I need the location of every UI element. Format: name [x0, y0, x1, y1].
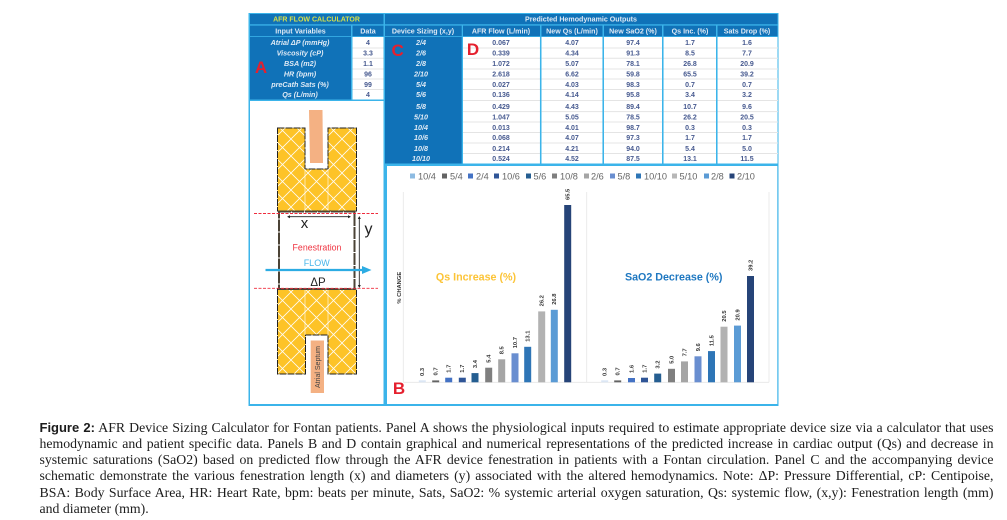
flow arrow	[266, 266, 372, 274]
bars: Qs increase: 26.8	[552, 293, 558, 305]
chart legend: 10/6	[502, 171, 520, 181]
flow label: FLOW	[304, 258, 330, 268]
output value cells: 8.5	[685, 50, 695, 58]
device sizing column: 2/6	[415, 48, 427, 58]
input variable labels: HR (bpm)	[284, 70, 317, 78]
input values	[352, 37, 384, 100]
output value cells: 0.7	[685, 82, 695, 89]
input column headers	[250, 26, 384, 36]
y axis label: % CHANGE	[397, 272, 403, 304]
panel A: input calculator	[250, 14, 384, 100]
chart legend: 5/8	[618, 171, 630, 181]
figure caption: Figure 2: AFR Device Sizing Calculator for Fontan patients. Panel A shows the physiological inputs required to estimate appropriate device size via a calculator that uses	[40, 420, 994, 435]
output value cells: 11.5	[740, 156, 754, 163]
figure frame	[248, 13, 778, 406]
lower atrial septum with label	[311, 340, 324, 393]
chart legend: 10/4	[418, 171, 436, 181]
output value cells: 4.14	[565, 92, 579, 99]
input variable labels: Viscosity (cP)	[277, 48, 324, 58]
dashed boundary lines	[254, 214, 378, 288]
device sizing column	[385, 37, 462, 164]
input values: 1.1	[363, 61, 373, 68]
bars: Qs increase: 65.5	[566, 188, 572, 200]
y dimension arrow	[358, 216, 372, 288]
output value cells: 1.7	[685, 135, 695, 142]
input variable labels: Atrial ΔP (mmHg)	[270, 38, 330, 47]
figure caption: systemic saturations (SaO2) based on predicted flow through the AFR device fenestration in patients with a Fontan circulation. Panel C and the accompanying device	[40, 452, 994, 467]
figure caption: and diameter (mm).	[40, 501, 149, 516]
output value cells: 98.7	[626, 125, 640, 132]
device sizing column: 2/10	[413, 70, 428, 78]
output value cells: 95.8	[626, 92, 640, 99]
input column headers: Data	[360, 27, 376, 35]
output value cells: 0.013	[492, 125, 510, 132]
lower atrial septum with label: Atrial Septum	[315, 346, 322, 388]
output value cells: 4.34	[565, 50, 579, 58]
bars: SaO2 decrease: 0.3	[603, 367, 609, 376]
output value cells: 65.5	[683, 72, 697, 78]
output value cells: 0.068	[492, 135, 510, 142]
device sizing column: 2/8	[415, 59, 426, 68]
output value cells: 2.618	[492, 72, 510, 78]
output value cells: 5.05	[565, 114, 579, 122]
output value cells: 0.339	[492, 50, 510, 58]
chart legend: 2/6	[591, 171, 604, 181]
figure caption: hemodynamic and patient specific data. Panels B and D contain graphical and numerical representations of the predicted increase in cardiac output (Qs) and decrease in	[40, 436, 994, 451]
output value cells: 5.0	[742, 146, 752, 153]
bars: SaO2 decrease: 0.7	[616, 367, 622, 376]
output value cells: 0.524	[492, 156, 510, 163]
output column headers: Sats Drop (%)	[724, 27, 771, 35]
chart legend: 5/4	[450, 171, 463, 181]
bars: Qs increase: 8.5	[500, 345, 506, 354]
output value cells: 10.7	[683, 104, 697, 111]
chart axis lines	[403, 192, 769, 382]
lower device disc	[278, 289, 356, 374]
output value cells: 94.0	[626, 146, 640, 153]
output value cells: 13.1	[683, 156, 697, 163]
bars: SaO2 decrease: 11.5	[710, 334, 716, 346]
output value cells: 4.07	[565, 40, 579, 47]
x dimension arrow: x	[301, 215, 309, 232]
chart legend: 5/6	[534, 171, 546, 181]
output value cells: 0.429	[492, 104, 510, 111]
bars: Qs increase: 26.2	[540, 295, 546, 306]
panel C and D: predicted outputs table	[385, 14, 778, 164]
bars: Qs increase: 1.7	[447, 365, 453, 373]
output value cells: 4.52	[565, 156, 579, 163]
bars: SaO2 decrease: 3.2	[656, 361, 662, 369]
bars: Qs increase	[419, 188, 572, 382]
output column headers	[385, 26, 778, 36]
output value cells: 4.43	[565, 104, 579, 111]
output value cells: 1.047	[492, 114, 510, 122]
input values: 4	[366, 92, 370, 99]
output value cells: 1.6	[742, 40, 752, 47]
input values: 3.3	[363, 50, 373, 58]
device sizing column: 10/8	[414, 144, 428, 153]
output value cells: 6.62	[565, 72, 579, 78]
output value cells: 20.9	[740, 61, 754, 68]
output column headers: Device Sizing (x,y)	[392, 27, 455, 35]
output value cells: 0.7	[742, 82, 752, 89]
output value cells: 97.4	[626, 40, 640, 47]
chart legend: 2/8	[711, 171, 724, 181]
output column headers: AFR Flow (L/min)	[472, 27, 531, 35]
output value cells: 0.067	[492, 40, 510, 47]
bars: SaO2 decrease: 1.7	[642, 365, 648, 373]
device sizing column: 5/6	[416, 90, 427, 99]
bars: Qs increase: 10.7	[513, 337, 519, 348]
input values: 99	[364, 82, 372, 89]
output value cells: 0.027	[492, 82, 510, 89]
output value cells: 78.5	[626, 114, 640, 122]
bars: Qs increase: 3.4	[473, 359, 479, 368]
output value cells: 4.03	[565, 82, 579, 89]
device sizing column: 5/4	[416, 80, 426, 89]
input variable labels: preCath Sats (%)	[270, 80, 329, 89]
figure caption	[40, 420, 994, 516]
fenestration label: Fenestration	[293, 243, 342, 253]
output value cells: 87.5	[626, 156, 640, 163]
chart legend	[410, 171, 755, 181]
input variable labels	[250, 37, 351, 100]
device sizing column: 10/4	[414, 123, 428, 132]
bars: Qs increase: 0.7	[434, 367, 440, 376]
chart legend: 10/8	[560, 171, 578, 181]
output value cells: 4.07	[565, 135, 579, 142]
output value cells: 0.136	[492, 92, 510, 99]
output value cells: 0.3	[742, 125, 752, 132]
device sizing column: 10/10	[412, 154, 430, 163]
output value cells	[463, 37, 778, 164]
output value cells: 0.3	[685, 125, 695, 132]
bars: SaO2 decrease: 9.6	[696, 342, 702, 351]
bars: SaO2 decrease	[601, 260, 754, 382]
device sizing column: 2/4	[415, 38, 426, 47]
panel B: bar charts	[387, 166, 777, 404]
bars: Qs increase: 0.3	[420, 367, 426, 376]
input column headers: Input Variables	[275, 27, 326, 35]
output value cells: 97.3	[626, 135, 640, 142]
calculator title: AFR FLOW CALCULATOR	[273, 17, 360, 24]
output value cells: 98.3	[626, 82, 640, 89]
output value cells: 59.8	[626, 72, 640, 78]
output value cells: 4.01	[565, 125, 579, 132]
bars: Qs increase: 1.7	[460, 365, 466, 373]
chart legend: 2/10	[737, 171, 755, 181]
output value cells: 4.21	[565, 146, 579, 153]
output value cells: 1.7	[742, 135, 752, 142]
upper atrial septum	[309, 110, 323, 163]
upper device disc	[278, 128, 356, 211]
output value cells: 5.4	[685, 146, 695, 153]
pressure differential label: ΔP	[310, 277, 326, 289]
input values: 96	[364, 72, 372, 78]
input variable labels: Qs (L/min)	[282, 90, 318, 99]
output value cells: 91.3	[626, 50, 640, 58]
input variable labels: BSA (m2)	[284, 59, 317, 68]
chart legend: 5/10	[680, 171, 697, 181]
output value cells: 1.072	[492, 61, 510, 68]
output value cells: 89.4	[626, 104, 640, 111]
panel letter A: A	[255, 58, 267, 77]
bars: SaO2 decrease: 20.9	[736, 309, 742, 321]
bars: SaO2 decrease: 39.2	[748, 260, 754, 271]
output value cells: 5.07	[565, 61, 579, 68]
output column headers: Qs Inc. (%)	[672, 27, 709, 35]
output value cells: 26.8	[683, 61, 697, 68]
device sizing column: 5/10	[414, 112, 428, 122]
device sizing column: 10/6	[414, 133, 429, 142]
bars: SaO2 decrease: 5.0	[670, 356, 676, 364]
output value cells: 1.7	[685, 40, 695, 47]
device sizing column: 5/8	[416, 102, 426, 111]
output value cells: 7.7	[742, 50, 752, 58]
panel letter C: C	[392, 41, 404, 60]
bars: SaO2 decrease: 7.7	[682, 348, 688, 356]
outputs title: Predicted Hemodynamic Outputs	[525, 16, 637, 24]
output value cells: 26.2	[683, 114, 697, 122]
chart title: Qs increase: Qs Increase (%)	[436, 272, 517, 284]
panel letter B: B	[393, 379, 405, 398]
fenestration outline	[279, 212, 354, 289]
x dimension arrow	[287, 215, 351, 232]
chart legend: 2/4	[476, 171, 489, 181]
y dimension arrow: y	[364, 221, 372, 238]
outputs title	[385, 14, 778, 24]
output value cells: 39.2	[740, 72, 754, 78]
output value cells: 3.2	[742, 92, 752, 99]
chart legend: 10/10	[644, 171, 667, 181]
output value cells: 3.4	[685, 92, 695, 99]
schematic panel: device diagram	[250, 101, 384, 404]
bars: Qs increase: 5.4	[487, 354, 493, 363]
output value cells: 78.1	[626, 61, 640, 68]
output column headers: New SaO2 (%)	[609, 27, 657, 35]
output value cells: 9.6	[742, 104, 752, 111]
figure caption: schematic demonstrate the various fenestration length (x) and diameters (y) associated with the altered hemodynamics. Note: ΔP: Pressure Differential, cP: Centipoise,	[40, 468, 994, 483]
bars: SaO2 decrease: 20.5	[722, 310, 728, 322]
panel letter D: D	[467, 40, 479, 59]
bars: Qs increase: 13.1	[526, 330, 532, 342]
output value cells: 20.5	[740, 114, 754, 122]
chart title: SaO2 decrease: SaO2 Decrease (%)	[625, 272, 723, 284]
disc seams	[305, 169, 328, 335]
figure caption: BSA: Body Surface Area, HR: Heart Rate, bpm: beats per minute, Sats, SaO2: % systemic arterial oxygen saturation, Qs: systemic flow, (x,y): Fenestration length (mm)	[40, 485, 994, 500]
input values: 4	[366, 40, 370, 47]
output value cells: 0.214	[492, 146, 510, 153]
bars: SaO2 decrease: 1.6	[630, 364, 636, 373]
output column headers: New Qs (L/min)	[546, 27, 598, 35]
